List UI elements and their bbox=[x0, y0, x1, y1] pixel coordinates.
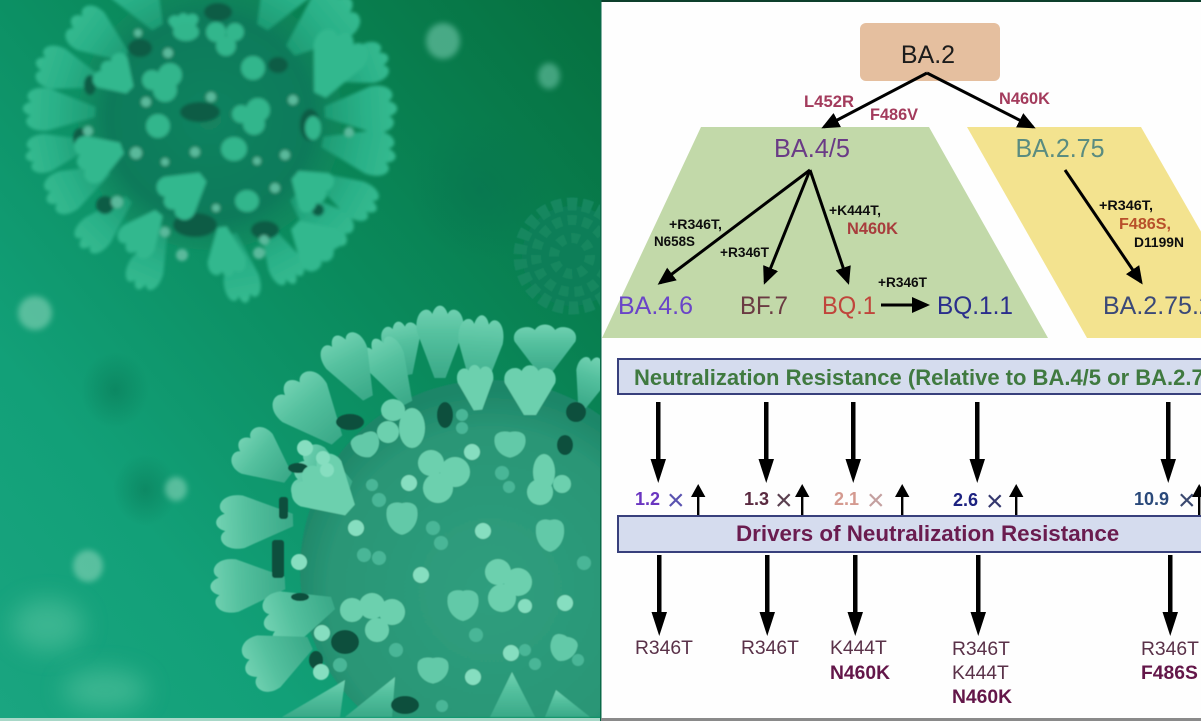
outer spikes large virus bbox=[209, 306, 614, 717]
black mutation labels: +K444T, bbox=[829, 203, 881, 218]
variant names bbox=[620, 296, 1201, 318]
black mutation labels: +R346T bbox=[720, 245, 770, 260]
drivers: BQ.1.1 bbox=[952, 639, 1012, 708]
box: BA.2: BA.2 bbox=[901, 41, 955, 69]
dark shadows upper virus bbox=[73, 3, 324, 239]
value: BF.7 bbox=[745, 492, 790, 507]
trefoils upper virus bbox=[142, 22, 321, 212]
arrows: resistance to values bbox=[650, 402, 1176, 483]
muted dots large virus bbox=[333, 409, 591, 712]
drivers: BA.2.75.2 bbox=[1141, 639, 1199, 684]
drivers: BQ.1: N460K bbox=[830, 663, 890, 684]
banner: neutralization resistance bbox=[618, 359, 1201, 394]
value: BQ.1: 2.1 bbox=[834, 489, 859, 509]
variant names: BQ.1.1 bbox=[937, 292, 1013, 320]
variant tree bbox=[602, 23, 1201, 338]
drivers: BA.4.6: R346T bbox=[635, 638, 693, 659]
variant names: BQ.1 bbox=[822, 292, 876, 320]
arrow: BA.2 to BA.4/5 bbox=[824, 73, 927, 127]
green region BA.4/5 family bbox=[602, 127, 1048, 338]
drivers: BA.2.75.2: R346T bbox=[1141, 639, 1199, 660]
value: BA.2.75.2 bbox=[1134, 484, 1196, 517]
box: BA.2 bbox=[860, 23, 1000, 81]
label: BA.4/5: BA.4/5 bbox=[774, 135, 850, 163]
value: BF.7: × bbox=[775, 484, 793, 517]
drivers: BQ.1: K444T bbox=[830, 638, 887, 659]
inner spikes upper virus bbox=[69, 12, 374, 279]
drivers: BQ.1.1: N460K bbox=[952, 687, 1012, 708]
virus: large foreground particle bbox=[210, 305, 600, 718]
value: BA.4.6: × bbox=[667, 484, 685, 517]
value: BQ.1.1 bbox=[954, 493, 1002, 508]
virus: upper particle bbox=[22, 0, 400, 306]
panel: virus photo bbox=[0, 0, 600, 718]
bokeh particles bbox=[12, 23, 560, 710]
mutation labels from BA.2: N460K bbox=[999, 90, 1050, 108]
fold-change values bbox=[636, 492, 1194, 508]
value: BA.2.75.2: × bbox=[1178, 484, 1196, 517]
drivers: BA.2.75.2: F486S bbox=[1141, 663, 1198, 684]
driver mutations bbox=[635, 638, 1199, 708]
arrows: drivers to mutations bbox=[652, 555, 1178, 636]
outer spikes upper virus bbox=[22, 0, 400, 306]
arrow: BA.2.75 to BA.2.75.2 bbox=[1065, 170, 1141, 282]
label: BA.2.75: BA.2.75 bbox=[1016, 135, 1104, 163]
arrow: BA.2 to BA.2.75 bbox=[927, 73, 1033, 127]
mutation labels from BA.2 bbox=[805, 92, 1050, 120]
dark gaps large virus bbox=[272, 402, 586, 714]
black mutation labels: D1199N bbox=[1134, 235, 1184, 250]
panel: right white diagram bbox=[601, 0, 1201, 721]
small dots large virus bbox=[291, 440, 573, 685]
drivers: BF.7: R346T bbox=[741, 638, 799, 659]
variant names: BF.7 bbox=[740, 292, 788, 320]
value: BA.4.6: 1.2 bbox=[635, 489, 660, 509]
banner: drivers of neutralization resistance bbox=[618, 516, 1201, 552]
mutation labels from BA.2: L452R bbox=[804, 93, 854, 111]
small distant virus bbox=[520, 204, 624, 308]
arrow: BQ.1 to BQ.1.1 bbox=[881, 304, 927, 306]
banner: drivers of neutralization resistance: Drivers of Neutralization Resistance bbox=[736, 521, 1119, 546]
drivers: BQ.1.1: K444T bbox=[952, 663, 1009, 684]
value: BQ.1: × bbox=[867, 484, 885, 517]
value: BA.4.6 bbox=[636, 492, 682, 507]
spike dots upper virus bbox=[83, 29, 354, 261]
shield spikes large virus bbox=[349, 429, 580, 684]
arrows from BA.4/5 bbox=[660, 170, 848, 283]
drivers: BQ.1 bbox=[830, 638, 890, 684]
drivers: BQ.1.1: R346T bbox=[952, 639, 1010, 660]
label: N460K: N460K bbox=[847, 220, 898, 238]
value: BQ.1.1: × bbox=[986, 485, 1004, 518]
yellow region BA.2.75 family bbox=[967, 127, 1201, 338]
value: BF.7: 1.3 bbox=[744, 489, 769, 509]
value: BA.2.75.2: 10.9 bbox=[1134, 489, 1169, 509]
black mutation labels bbox=[654, 198, 1184, 290]
value: BQ.1 bbox=[834, 492, 882, 507]
trefoils large virus bbox=[284, 363, 571, 642]
black mutation labels: +R346T, bbox=[1099, 198, 1153, 213]
black mutation labels: +R346T bbox=[878, 275, 928, 290]
variant names: BA.4.6 bbox=[618, 292, 693, 320]
black mutation labels: N658S bbox=[654, 234, 695, 249]
mutation labels from BA.2: F486V bbox=[870, 106, 918, 124]
black mutation labels: +R346T, bbox=[669, 217, 722, 232]
label: F486S: F486S, bbox=[1119, 216, 1171, 233]
value: BQ.1.1: 2.6 bbox=[953, 490, 978, 510]
up arrows bbox=[691, 484, 1201, 516]
